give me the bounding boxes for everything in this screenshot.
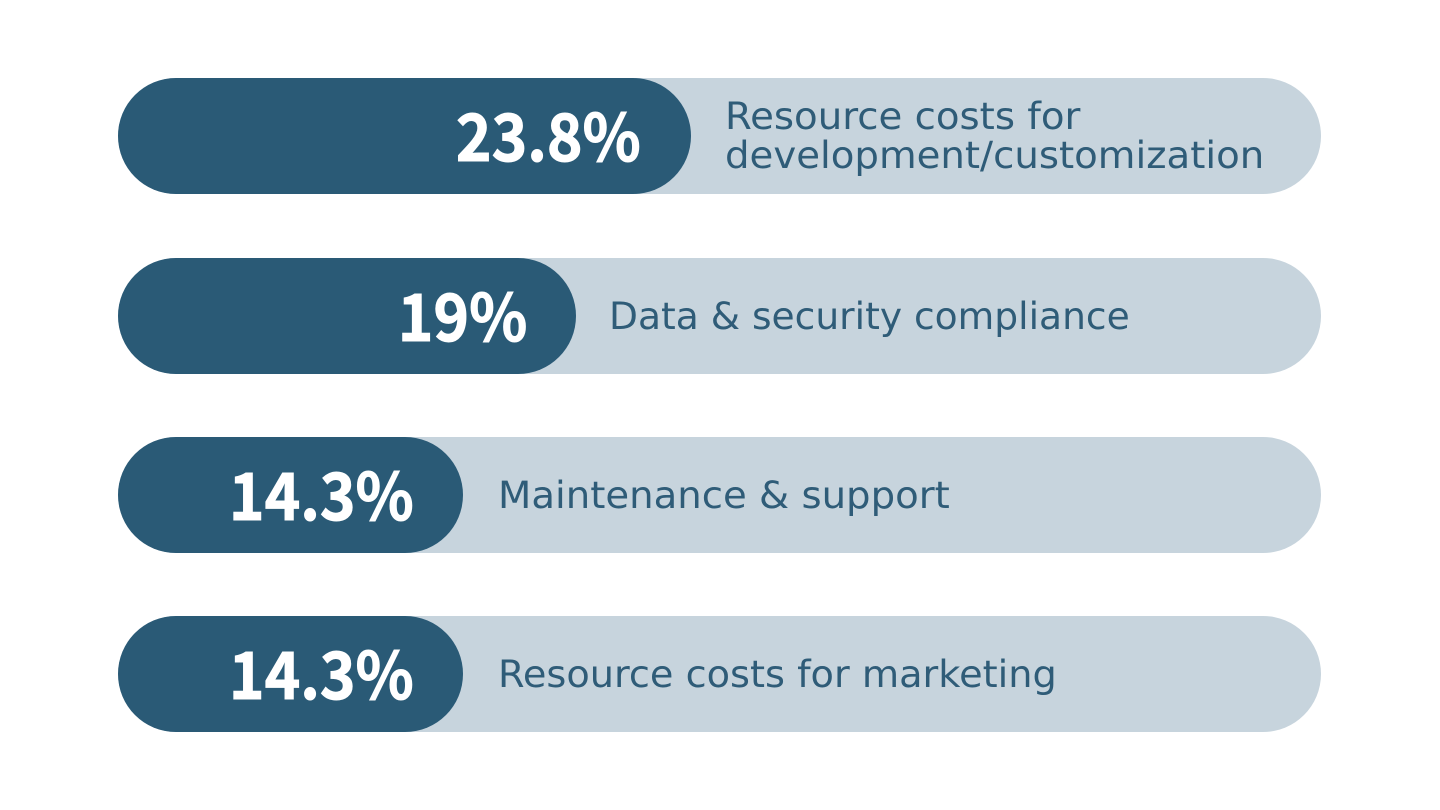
label: development/customization: [725, 134, 1264, 177]
bar: resource costs for marketing: [118, 616, 1321, 732]
value fill 19%: 19%: [397, 266, 527, 360]
bar: data & security compliance: [118, 258, 1321, 374]
label: Resource costs for: [725, 95, 1080, 138]
bar: resource costs for development/customization: [118, 78, 1321, 194]
value fill 14.3%: [118, 616, 463, 732]
value fill 14.3%: [118, 437, 463, 553]
value fill 14.3%: 14.3%: [229, 445, 414, 539]
value fill 19%: [118, 258, 576, 374]
value fill 23.8%: 23.8%: [456, 86, 641, 180]
label: Maintenance & support: [498, 474, 950, 517]
label: Data & security compliance: [609, 295, 1130, 338]
label: [725, 95, 1264, 177]
value fill 14.3%: 14.3%: [229, 624, 414, 718]
bar: maintenance & support: [118, 437, 1321, 553]
value fill 23.8%: [118, 78, 691, 194]
label: Resource costs for marketing: [498, 653, 1057, 696]
